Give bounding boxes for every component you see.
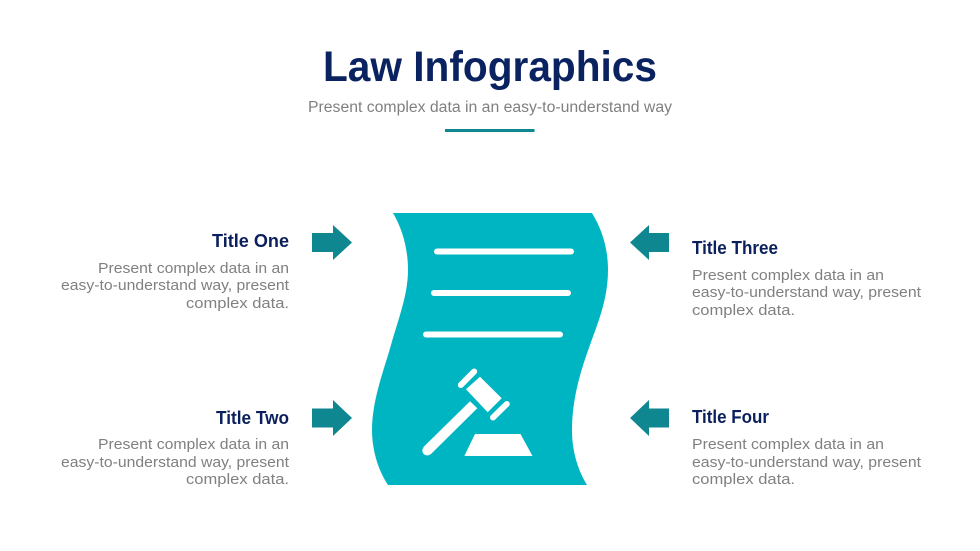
body text: Present complex data in an [98,436,289,453]
body text [692,267,922,319]
arrow: title two [312,400,352,436]
body text: complex data. [692,471,795,488]
document text lines [426,252,571,334]
body text: complex data. [692,302,795,319]
panel: legal document [372,213,608,485]
body text: easy-to-understand way, present [692,284,922,301]
body text [61,436,290,488]
body text: easy-to-understand way, present [61,454,290,471]
heading: Title Three [692,238,778,258]
panel: title two [61,408,290,488]
subtitle: Present complex data in an easy-to-understand way [308,99,672,116]
body text: easy-to-understand way, present [61,277,290,294]
arrow: title three [630,225,669,260]
panel: title one [61,231,290,312]
title underline [445,129,534,132]
body text: complex data. [186,471,289,488]
panel: title three [692,238,922,319]
body text [61,260,290,312]
title: Law Infographics [323,43,657,91]
heading: Title Four [692,407,769,427]
body text: complex data. [186,295,289,312]
body text: Present complex data in an [692,267,884,284]
panel: title four [692,407,922,488]
heading: Title One [212,231,289,251]
document shape [372,213,608,485]
body text [692,436,922,488]
body text: Present complex data in an [692,436,884,453]
icon: gavel [422,372,532,456]
arrow: title four [630,400,669,436]
heading: Title Two [216,408,289,428]
body text: Present complex data in an [98,260,289,277]
body text: easy-to-understand way, present [692,454,922,471]
arrow: title one [312,225,352,260]
